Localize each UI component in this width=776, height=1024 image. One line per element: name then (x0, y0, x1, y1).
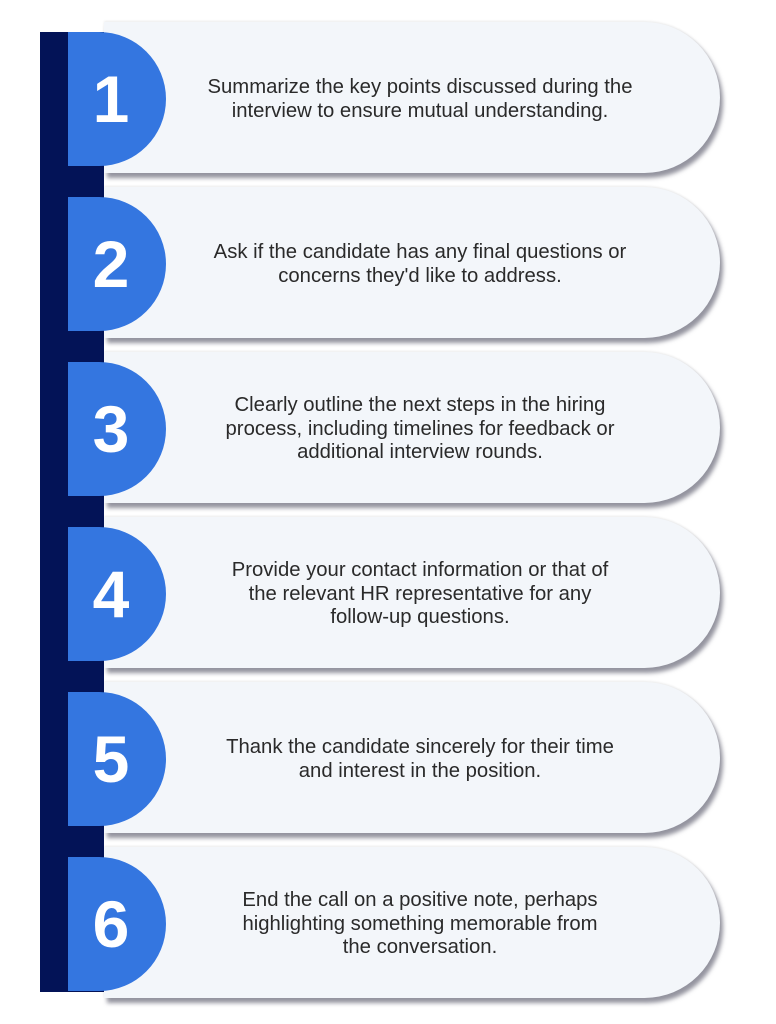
card 3 (104, 352, 720, 503)
badge 1: 1 (93, 62, 129, 136)
badge 6: 6 (93, 887, 129, 961)
badge 6 (68, 857, 166, 991)
text 3: process, including timelines for feedback or (226, 418, 614, 440)
badge 5 (68, 692, 166, 826)
badge 4 (68, 527, 166, 661)
badge 1 (68, 32, 166, 166)
badge 3 (68, 362, 166, 496)
card 5 (104, 682, 720, 833)
text 5: and interest in the position. (299, 760, 541, 782)
vertical navy bar (40, 32, 104, 992)
text 5: Thank the candidate sincerely for their time (226, 736, 614, 758)
card 1 (104, 22, 720, 173)
text 1: interview to ensure mutual understanding. (232, 100, 608, 122)
text 3 (226, 394, 614, 463)
badge 2: 2 (93, 227, 129, 301)
text 6: End the call on a positive note, perhaps (242, 889, 598, 911)
text 1: Summarize the key points discussed during the (208, 76, 632, 98)
text 3: additional interview rounds. (297, 441, 543, 463)
card 2 (104, 187, 720, 338)
text 3: Clearly outline the next steps in the hiring (235, 394, 605, 416)
text 4: follow-up questions. (330, 606, 510, 628)
badge 2 (68, 197, 166, 331)
badge 3: 3 (93, 392, 129, 466)
text 2: concerns they'd like to address. (278, 264, 562, 286)
text 4 (232, 559, 608, 628)
text 6: highlighting something memorable from (242, 913, 598, 935)
text 2 (214, 241, 626, 286)
text 4: the relevant HR representative for any (249, 583, 591, 605)
text 4: Provide your contact information or that of (232, 559, 608, 581)
text 5 (226, 736, 614, 782)
text 6 (242, 889, 598, 958)
badge 5: 5 (93, 722, 129, 796)
text 2: Ask if the candidate has any final questions or (214, 241, 626, 263)
badge 4: 4 (93, 557, 129, 631)
text 6: the conversation. (343, 936, 497, 958)
card 4 (104, 517, 720, 668)
card 6 (104, 847, 720, 998)
text 1 (208, 76, 632, 122)
